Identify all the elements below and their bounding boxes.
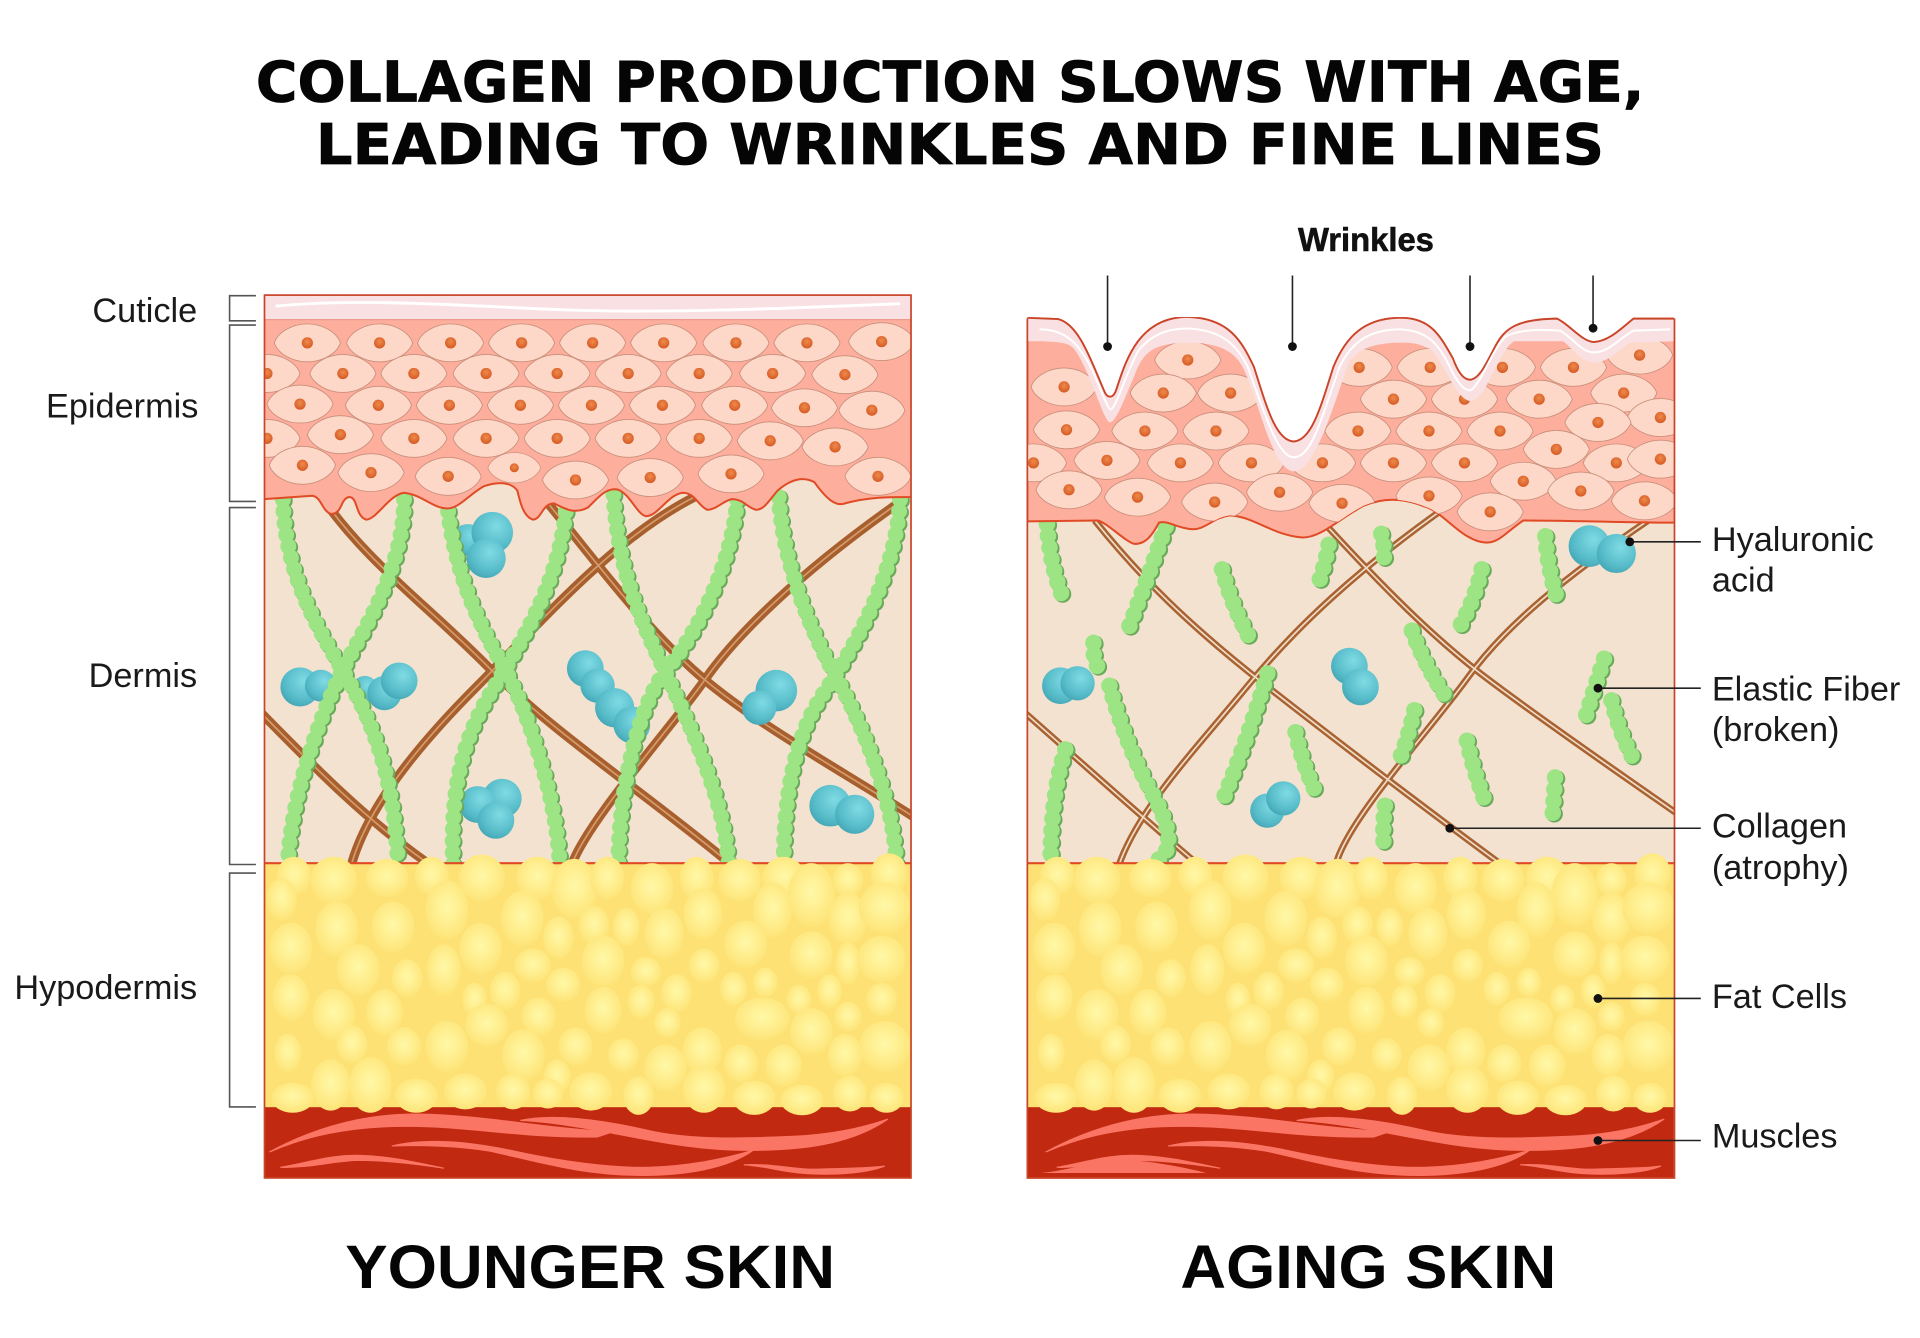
panel: younger skin <box>234 295 915 1178</box>
callout: fat cells <box>1594 978 1847 1016</box>
dermis layer <box>265 480 910 862</box>
layer labels <box>14 292 198 1007</box>
callout: muscles: Muscles <box>1712 1117 1838 1155</box>
panel frame: younger <box>264 295 911 1178</box>
panel: aging skin <box>1000 317 1693 1178</box>
callout: collagen: (atrophy) <box>1712 849 1849 887</box>
fat cells layer <box>264 853 912 1115</box>
hyaluronic acid clusters <box>280 512 874 839</box>
callout: elastic fiber: (broken) <box>1712 711 1839 749</box>
callout: elastic fiber: Elastic Fiber <box>1712 670 1900 708</box>
layer labels: Epidermis <box>46 388 198 426</box>
wrinkles label: Wrinkles <box>1298 222 1434 259</box>
wrinkle pointers <box>1103 276 1597 351</box>
elastic fibers broken <box>1047 524 1636 863</box>
layer labels: Dermis <box>89 657 197 695</box>
callout: hyaluronic acid: Hyaluronic <box>1712 521 1874 559</box>
callout: collagen: Collagen <box>1712 808 1847 846</box>
muscle layer <box>264 1107 911 1178</box>
callout: collagen <box>1445 808 1849 887</box>
cuticle layer with wrinkles <box>1027 317 1674 471</box>
dermis layer <box>1027 490 1674 871</box>
layer labels: Cuticle <box>92 292 197 330</box>
callout: elastic fiber <box>1594 670 1900 749</box>
title: LEADING TO WRINKLES AND FINE LINES <box>316 113 1604 178</box>
panel heading: aging skin: AGING SKIN <box>1180 1233 1556 1301</box>
cuticle layer <box>264 295 911 320</box>
title <box>256 51 1644 178</box>
callout: fat cells: Fat Cells <box>1712 978 1847 1016</box>
callout: hyaluronic acid <box>1625 521 1874 599</box>
elastic fibers <box>283 495 902 866</box>
panel frame: aging <box>1027 318 1674 1178</box>
fat cells layer <box>1027 853 1675 1115</box>
hyaluronic acid clusters <box>1042 525 1636 828</box>
collagen fibers <box>262 496 913 864</box>
epidermis layer <box>265 320 910 521</box>
layer labels: Hypodermis <box>14 969 197 1007</box>
epidermis cells <box>234 323 915 499</box>
callout: muscles <box>1594 1117 1838 1155</box>
title: COLLAGEN PRODUCTION SLOWS WITH AGE, <box>256 51 1644 116</box>
callout: hyaluronic acid: acid <box>1712 561 1775 599</box>
layer brackets <box>230 296 256 1107</box>
epidermis layer <box>1027 317 1674 544</box>
epidermis cells <box>1000 336 1693 531</box>
collagen fibers <box>1026 513 1676 864</box>
muscle layer <box>1027 1107 1674 1178</box>
panel heading: younger skin: YOUNGER SKIN <box>345 1233 835 1301</box>
